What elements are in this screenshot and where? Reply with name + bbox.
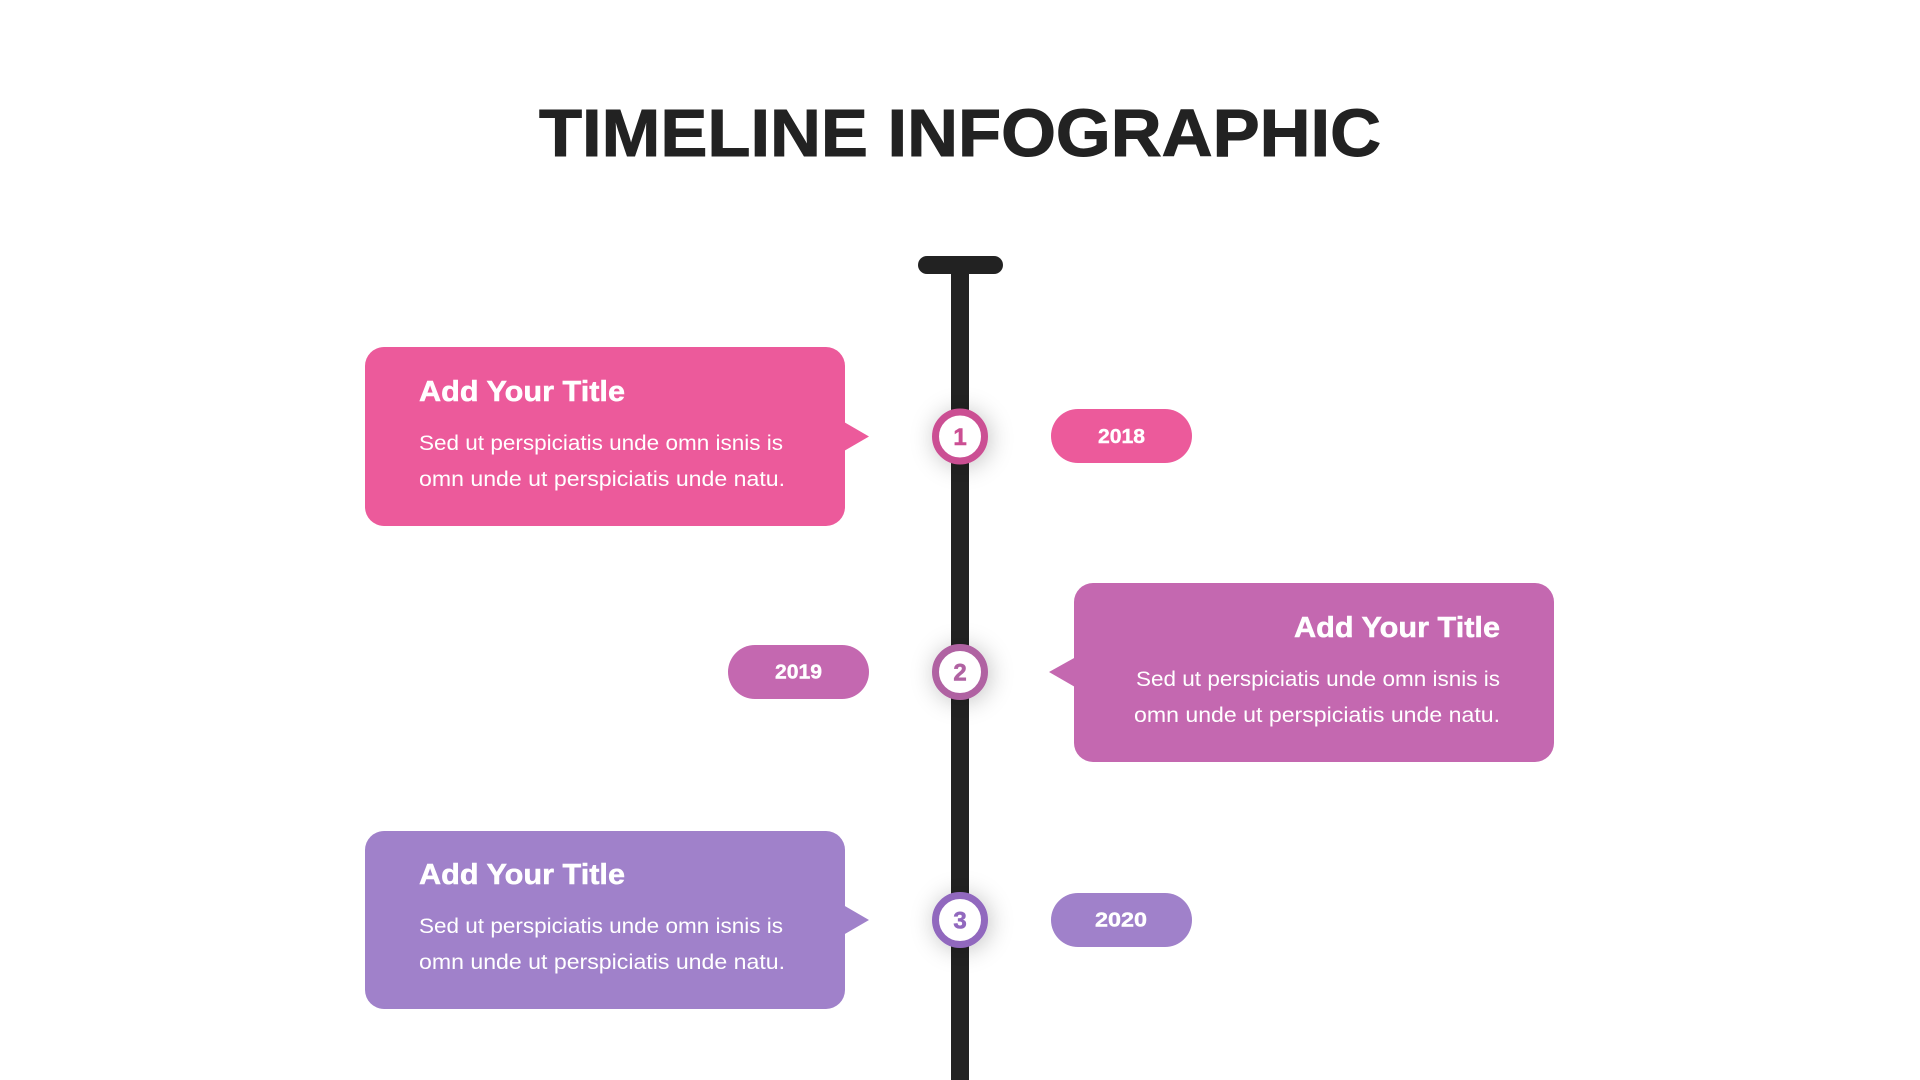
marker 3: 3 [953, 908, 967, 934]
panel: event 2 callout [1049, 583, 1554, 762]
panel: event 1 callout [365, 347, 869, 526]
year pill 2020 [1051, 893, 1192, 947]
event 3 description: Sed ut perspiciatis unde omn isnis is [419, 914, 783, 938]
timeline axis [918, 256, 1003, 1080]
year pill 2020: 2020 [1095, 910, 1147, 932]
marker 2: 2 [953, 660, 967, 686]
event 1 description: omn unde ut perspiciatis unde natu. [419, 467, 785, 491]
event 3 title: Add Your Title [419, 859, 625, 891]
marker 2 [936, 648, 984, 696]
year pill 2018 [1051, 409, 1192, 463]
event 1 title: Add Your Title [419, 376, 625, 408]
event 2 description: omn unde ut perspiciatis unde natu. [1134, 703, 1500, 727]
year pill 2018: 2018 [1098, 426, 1145, 448]
event 3 description: omn unde ut perspiciatis unde natu. [419, 950, 785, 974]
event 2 description [1134, 667, 1500, 727]
title: TIMELINE INFOGRAPHIC [539, 96, 1381, 171]
marker 1 [936, 412, 984, 461]
event 2 title: Add Your Title [1294, 612, 1500, 644]
year pill 2019: 2019 [775, 662, 822, 684]
year pill 2019 [728, 645, 869, 699]
event 3 description [419, 914, 785, 974]
panel: event 3 callout [365, 831, 869, 1009]
marker 1: 1 [953, 424, 967, 451]
event 2 description: Sed ut perspiciatis unde omn isnis is [1136, 667, 1500, 691]
marker 3 [936, 896, 984, 944]
event 1 description: Sed ut perspiciatis unde omn isnis is [419, 431, 783, 455]
event 1 description [419, 431, 785, 491]
